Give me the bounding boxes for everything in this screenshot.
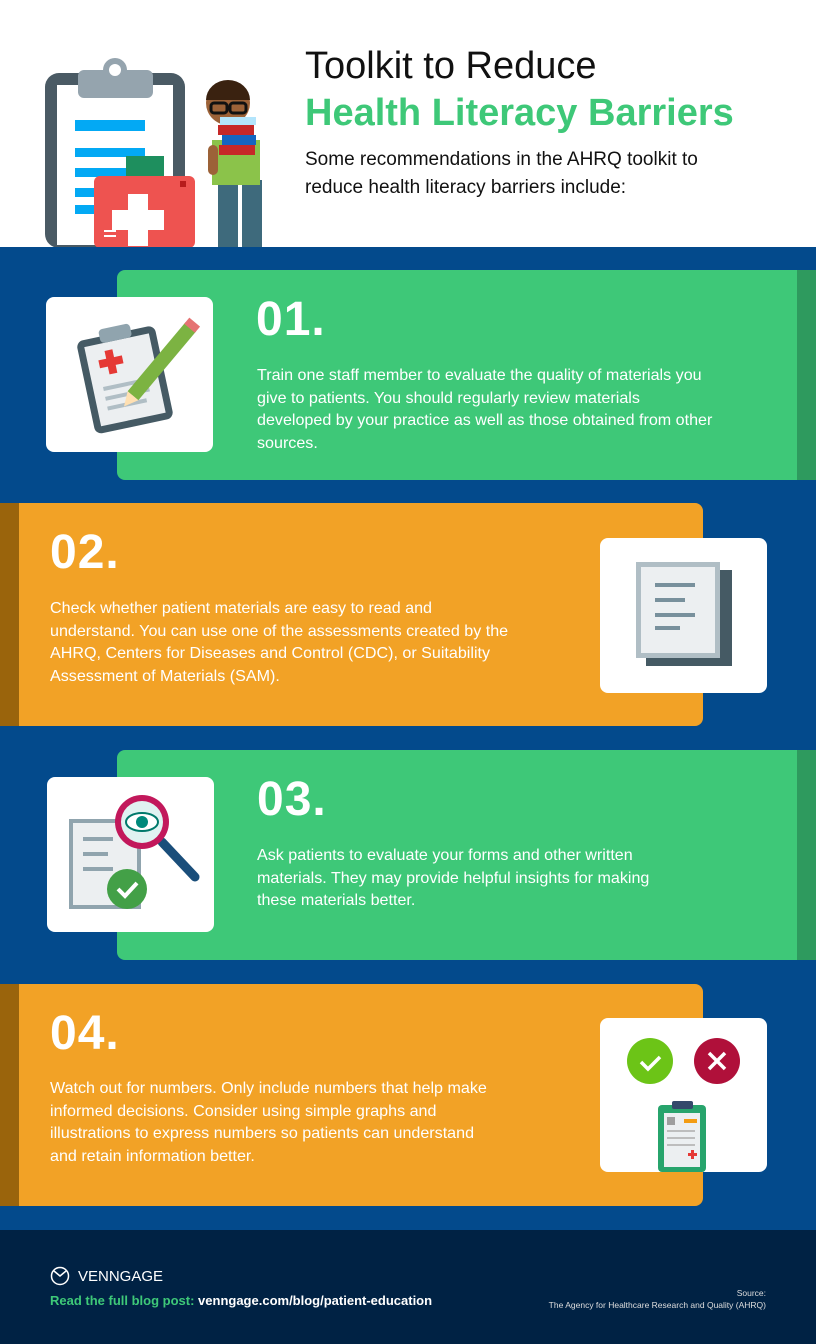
subtitle bbox=[305, 149, 698, 198]
source: Source: bbox=[737, 1288, 766, 1298]
text 03: materials. They may provide helpful insights for making bbox=[257, 868, 649, 886]
text 02: Check whether patient materials are easy to read and bbox=[50, 599, 432, 617]
text 02: AHRQ, Centers for Diseases and Control (CDC), or Suitability bbox=[50, 644, 490, 662]
panel: 02 bbox=[0, 503, 703, 726]
blog link: Read the full blog post: venngage.com/blog/patient-education bbox=[50, 1293, 432, 1308]
text 04 bbox=[50, 1079, 487, 1164]
source: The Agency for Healthcare Research and Quality (AHRQ) bbox=[549, 1300, 766, 1310]
text 02: understand. You can use one of the assessments created by the bbox=[50, 622, 508, 640]
panel: 01 bbox=[117, 270, 816, 480]
icon: person with books bbox=[206, 80, 262, 248]
header illustration bbox=[45, 58, 262, 247]
icon box 01: clipboard with pencil bbox=[46, 297, 213, 452]
text 04: informed decisions. Consider using simple graphs and bbox=[50, 1102, 436, 1120]
subtitle: reduce health literacy barriers include: bbox=[305, 177, 626, 198]
text 03: Ask patients to evaluate your forms and other written bbox=[257, 846, 633, 864]
icon box 02: documents bbox=[600, 538, 767, 693]
source bbox=[548, 1288, 766, 1310]
footer bbox=[0, 1230, 816, 1344]
panel: 04 bbox=[0, 984, 703, 1206]
venngage logo bbox=[50, 1266, 163, 1286]
number 04: 04. bbox=[50, 1007, 120, 1060]
title: Health Literacy Barriers bbox=[305, 92, 734, 134]
number 03: 03. bbox=[257, 773, 327, 826]
text 02 bbox=[50, 599, 508, 684]
text 04: and retain information better. bbox=[50, 1146, 255, 1164]
icon: clipboard bbox=[45, 58, 185, 248]
icon box 03: magnifier bbox=[47, 777, 214, 932]
number 01: 01. bbox=[256, 293, 326, 346]
text 02: Assessment of Materials (SAM). bbox=[50, 666, 280, 684]
text 01: give to patients. You should regularly review materials bbox=[257, 388, 640, 406]
text 04: Watch out for numbers. Only include numbers that help make bbox=[50, 1079, 487, 1097]
text 01 bbox=[257, 366, 712, 452]
text 03: these materials better. bbox=[257, 891, 415, 909]
subtitle: Some recommendations in the AHRQ toolkit to bbox=[305, 149, 698, 170]
text 04: illustrations to express numbers so patients can understand bbox=[50, 1124, 474, 1142]
text 01: developed by your practice as well as those obtained from other bbox=[257, 411, 712, 429]
title bbox=[305, 45, 734, 134]
icon: first aid kit bbox=[94, 156, 195, 248]
panel: 03 bbox=[117, 750, 816, 960]
text 03 bbox=[257, 846, 649, 909]
title: Toolkit to Reduce bbox=[305, 45, 596, 87]
text 01: sources. bbox=[257, 434, 318, 452]
number 02: 02. bbox=[50, 526, 120, 579]
icon box 04: check, cross, clipboard bbox=[600, 1018, 767, 1172]
venngage logo: VENNGAGE bbox=[78, 1268, 163, 1284]
text 01: Train one staff member to evaluate the quality of materials you bbox=[257, 366, 702, 384]
blue background bbox=[0, 247, 816, 1230]
